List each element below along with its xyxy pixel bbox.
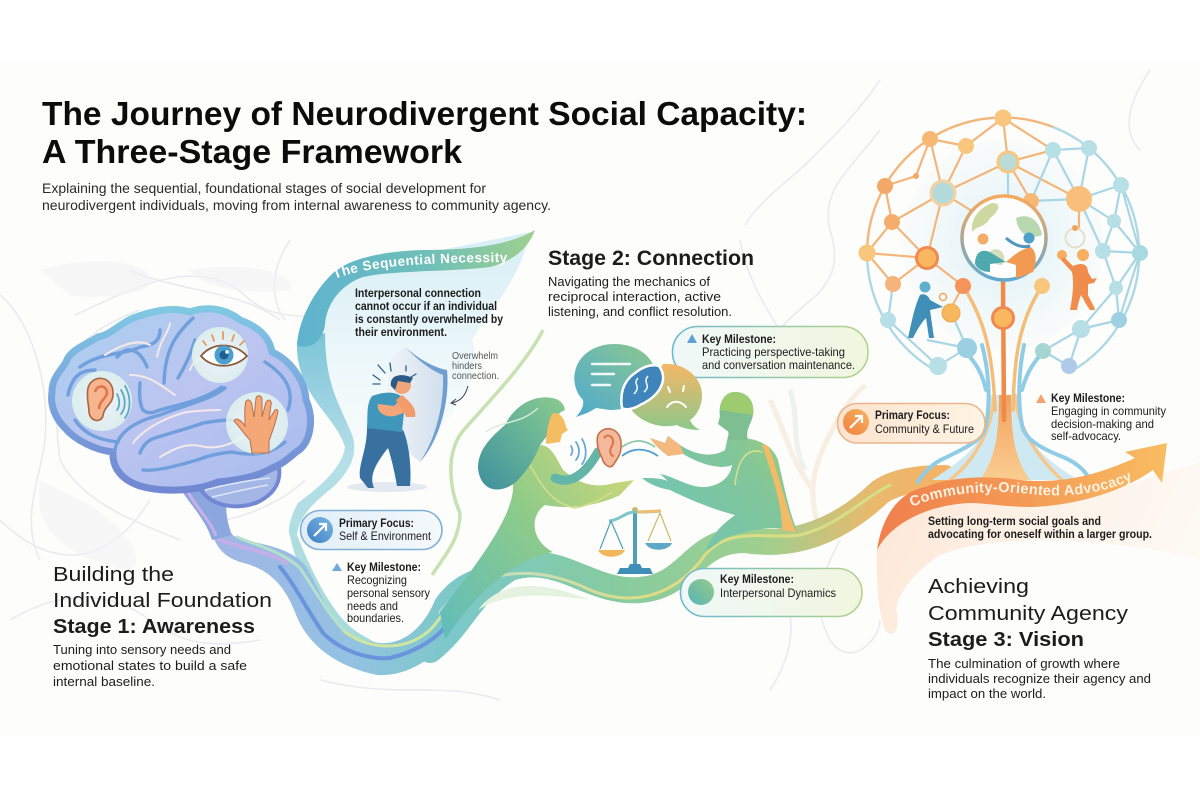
stage 3 text block: impact on the world.	[928, 686, 1046, 701]
man body	[642, 436, 797, 552]
panel statement: cannot occur if an individual	[355, 299, 497, 313]
network edges	[867, 118, 1079, 310]
annotation: overwhelm hinders connection: Overwhelm	[452, 351, 498, 362]
subtitle: Explaining the sequential, foundational stages of social development for	[42, 180, 486, 196]
stage 2 text block: reciprocal interaction, active	[548, 289, 721, 304]
key milestone: stage 3: Engaging in community	[1051, 404, 1166, 418]
key milestone: stage 1	[332, 560, 430, 625]
stage 3 text block: Community Agency	[928, 602, 1129, 625]
soft green sweep under woman	[478, 586, 590, 610]
pill text: Self & Environment	[339, 529, 432, 543]
key milestone: stage 3: Key Milestone:	[1051, 391, 1125, 405]
advocacy description: advocating for oneself within a larger group.	[928, 527, 1152, 541]
stage 2 description: Navigating the mechanics of	[548, 274, 710, 289]
stage 1 description: Tuning into sensory needs and	[53, 642, 231, 657]
key milestone: stage 1: needs and	[347, 599, 398, 613]
icon: blue arrow	[307, 517, 333, 543]
flowing ribbon connecting stages	[208, 478, 945, 675]
pill: key milestone, interpersonal dynamics	[680, 568, 862, 616]
band heading: The Sequential Necessity	[335, 252, 508, 278]
tree glow	[903, 140, 1103, 350]
pill: key milestone, perspective-taking	[672, 326, 868, 378]
icon: person right	[1057, 225, 1097, 310]
key milestone: stage 3	[1036, 391, 1166, 443]
panel statement: is constantly overwhelmed by	[355, 312, 503, 326]
man head	[718, 392, 753, 440]
side band	[289, 333, 380, 645]
left ribbon	[208, 525, 510, 675]
key milestone: stage 1: Key Milestone:	[347, 560, 421, 574]
stage 1 text block: internal baseline.	[53, 674, 155, 689]
ribbon arrow: community-oriented advocacy: Community-Oriented Advocacy	[910, 472, 1130, 506]
pill text: Primary Focus:	[339, 516, 414, 530]
panel background	[308, 232, 530, 484]
pill: key milestone, perspective-taking: Practicing perspective-taking	[702, 345, 845, 359]
stage 1 text block	[53, 564, 272, 689]
stage 2 text block	[548, 247, 754, 319]
pill: primary focus, community and future: Primary Focus:	[875, 408, 950, 422]
pill: primary focus, community and future: Community & Future	[875, 422, 974, 436]
pill: primary focus, self and environment	[300, 510, 442, 550]
cerebellum	[197, 462, 279, 506]
title	[42, 95, 807, 170]
subtitle	[42, 180, 551, 213]
cerebellum folds	[205, 478, 270, 497]
icon: eye in bubble	[192, 327, 248, 383]
ribbon arrow: community-oriented advocacy	[877, 443, 1167, 550]
illustration: brain	[52, 309, 311, 540]
speech lines	[592, 364, 630, 385]
panel statement: their environment.	[355, 325, 447, 339]
man raised hand	[650, 436, 684, 456]
stage 3 description: The culmination of growth where	[928, 656, 1120, 671]
key milestone: stage 3: decision-making and	[1051, 417, 1154, 431]
speech bubble: left	[574, 344, 656, 417]
icon: person behind shield	[347, 347, 448, 492]
woman face	[546, 413, 568, 444]
key milestone: stage 3: self-advocacy.	[1051, 429, 1121, 443]
stage 3 text block: individuals recognize their agency and	[928, 671, 1151, 686]
brain stem	[178, 485, 232, 540]
woman body	[440, 445, 634, 640]
pale green contour line	[432, 330, 543, 575]
key milestone: stage 1: Recognizing	[347, 573, 407, 587]
annotation: overwhelm hinders connection	[452, 351, 499, 382]
arrow: annotation pointer	[451, 386, 468, 405]
advocacy description: Setting long-term social goals and	[928, 514, 1101, 528]
ringed hub nodes	[916, 152, 1092, 328]
stage 2 text block: listening, and conflict resolution.	[548, 304, 732, 319]
pill: key milestone, perspective-taking: Key Milestone:	[702, 332, 776, 346]
outer ring	[867, 117, 1053, 253]
title: The Journey of Neurodivergent Social Capacity:	[42, 95, 807, 132]
pill: key milestone, interpersonal dynamics: Interpersonal Dynamics	[720, 586, 836, 600]
stage 1 heading: Building the	[53, 564, 174, 586]
key milestone: stage 1: boundaries.	[347, 611, 404, 625]
woman hair	[478, 397, 565, 490]
icon: globe with shaking hands	[962, 196, 1046, 280]
title: A Three-Stage Framework	[42, 133, 463, 170]
peach area behind stage 3	[877, 462, 1200, 634]
bubble overlap with waves	[621, 365, 663, 409]
stage 3 text block	[928, 575, 1151, 701]
icon: hand in bubble	[226, 392, 288, 454]
icon: large ear	[597, 429, 621, 467]
annotation: overwhelm hinders connection: hinders	[452, 361, 482, 372]
listening arcs	[622, 441, 658, 456]
panel: the sequential necessity	[289, 230, 535, 642]
green stream	[430, 478, 945, 650]
pill text	[339, 516, 432, 543]
subtitle: neurodivergent individuals, moving from internal awareness to community agency.	[42, 197, 551, 213]
panel statement	[355, 286, 503, 339]
stage 2 heading: Stage 2: Connection	[548, 247, 754, 270]
icon: balance scale	[598, 507, 672, 574]
pill: key milestone, interpersonal dynamics: Key Milestone:	[720, 572, 794, 586]
pill: primary focus, community and future	[838, 404, 985, 443]
sad face	[667, 386, 686, 407]
illustration: network tree	[858, 110, 1148, 482]
woman raised arm	[555, 452, 598, 480]
stage 3 text block: Stage 3: Vision	[928, 628, 1084, 651]
stage 1 text block: emotional states to build a safe	[53, 658, 247, 673]
network nodes	[858, 110, 1050, 294]
brain folds	[68, 318, 290, 470]
stage 1 text block: Stage 1: Awareness	[53, 615, 255, 638]
stage 1 text block: Individual Foundation	[53, 590, 272, 612]
panel statement: Interpersonal connection	[355, 286, 481, 300]
curved band	[297, 230, 535, 347]
trunk fans	[918, 280, 1090, 482]
advocacy description	[928, 514, 1152, 541]
stage 3 heading: Achieving	[928, 575, 1029, 598]
sound waves	[571, 439, 586, 464]
speech bubble: right frowning	[628, 364, 702, 430]
annotation: overwhelm hinders connection: connection.	[452, 371, 499, 382]
faint background tree	[770, 385, 865, 530]
pill: key milestone, perspective-taking: and conversation maintenance.	[702, 358, 855, 372]
brain outline	[52, 309, 311, 490]
key milestone: stage 1: personal sensory	[347, 586, 430, 600]
icon: ear in bubble	[72, 371, 132, 431]
icon: person left	[908, 282, 960, 338]
illustration: two people in conversation	[440, 344, 797, 640]
